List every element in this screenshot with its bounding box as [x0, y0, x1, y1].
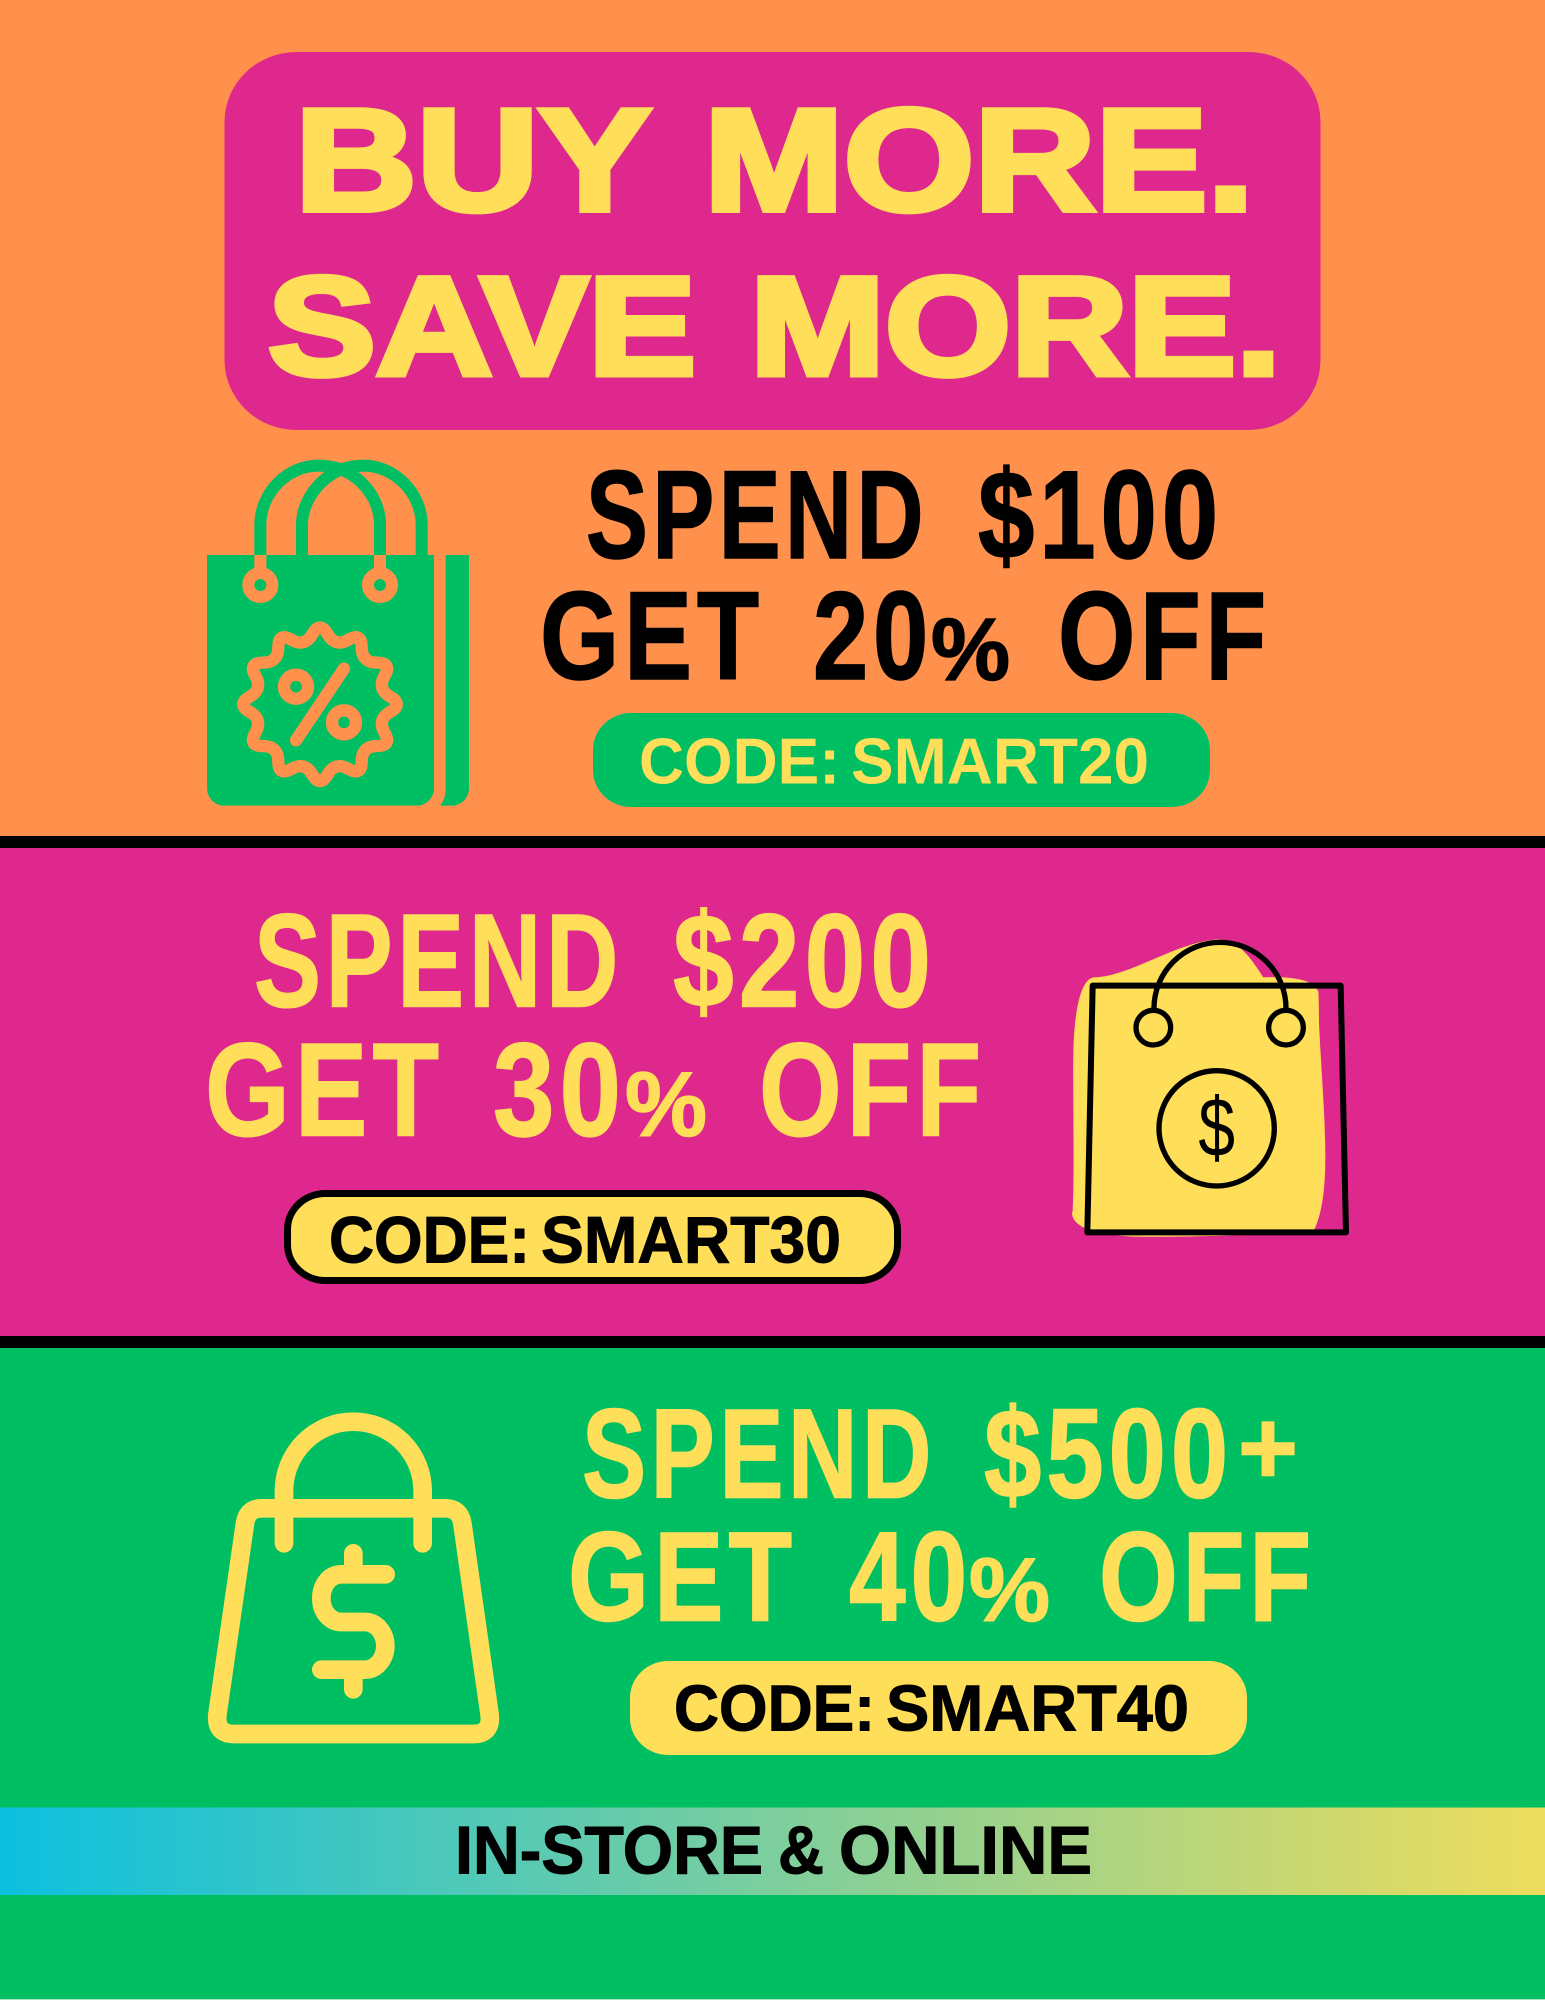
bag back panel: [440, 555, 469, 806]
code text: [674, 1672, 1189, 1744]
handle eyelets: [248, 555, 392, 597]
footer text: IN-STORE: [455, 1812, 763, 1888]
get 30 percent off: OFF: [759, 1016, 986, 1164]
code text: [639, 724, 1149, 798]
footer text: &: [778, 1812, 824, 1888]
get 20 percent off: %: [931, 600, 1010, 699]
bag outline: [1087, 986, 1346, 1232]
spend 200: SPEND: [254, 888, 623, 1036]
handle: [1154, 942, 1286, 1010]
get 40 percent off: [568, 1506, 1316, 1648]
bag body outline: [217, 1508, 490, 1734]
footer banner: [0, 1808, 1545, 1895]
get 30 percent off: 30: [493, 1016, 626, 1164]
title line 2: SAVE: [268, 248, 696, 404]
bag handles: [260, 466, 422, 555]
offer 1 headline: [540, 446, 1271, 706]
code pill: SMART30: [288, 1194, 898, 1280]
spend 500+: +: [1238, 1390, 1298, 1507]
icon: green shopping bag with percent badge: [207, 466, 469, 806]
code text: [329, 1202, 841, 1276]
icon: yellow outline shopping bag with dollar: [217, 1422, 490, 1734]
code text: SMART40: [886, 1672, 1189, 1744]
dollar coin: $: [1198, 1081, 1235, 1174]
code text: SMART20: [851, 724, 1149, 798]
title banner: [224, 52, 1320, 430]
code text: CODE:: [329, 1202, 530, 1276]
gradient band: [0, 1808, 1545, 1895]
spend 100: SPEND: [586, 446, 928, 585]
bag body: [207, 555, 434, 806]
get 40 percent off: GET: [568, 1506, 797, 1648]
percent badge: [243, 628, 397, 781]
get 40 percent off: %: [969, 1541, 1050, 1641]
get 40 percent off: OFF: [1099, 1506, 1316, 1648]
get 30 percent off: %: [625, 1054, 707, 1156]
code pill: SMART20: [593, 713, 1210, 807]
footer text: [455, 1812, 1092, 1888]
title background pill: [224, 52, 1320, 430]
panel: green bottom section: [0, 1348, 1545, 2000]
offer 2 headline: [205, 888, 986, 1164]
title line 2: [268, 248, 1281, 404]
spend 500+: SPEND: [582, 1382, 936, 1524]
dollar coin: [1159, 1071, 1274, 1186]
dollar symbol: [321, 1553, 386, 1689]
get 40 percent off: 40: [849, 1506, 972, 1648]
code text: CODE:: [674, 1672, 875, 1744]
title line 1: [295, 79, 1254, 241]
eyelets: [1136, 1010, 1303, 1045]
panel: magenta middle section: [0, 848, 1545, 1336]
title line 2: MORE.: [750, 248, 1281, 404]
get 30 percent off: [205, 1016, 986, 1164]
spend 200: $200: [673, 888, 936, 1036]
code text: SMART30: [541, 1202, 841, 1276]
icon: yellow shopping bag with dollar coin: [1072, 939, 1346, 1237]
title line 1: MORE.: [704, 79, 1254, 241]
code pill: SMART40: [630, 1661, 1247, 1755]
handle: [284, 1422, 423, 1543]
footer text: ONLINE: [839, 1812, 1092, 1888]
get 20 percent off: OFF: [1058, 567, 1271, 706]
spend 500+: $500: [984, 1382, 1233, 1524]
panel: orange top section: [0, 0, 1545, 836]
get 30 percent off: GET: [205, 1016, 444, 1164]
spend 500+: [582, 1382, 1298, 1524]
get 20 percent off: [540, 567, 1271, 706]
code text: CODE:: [639, 724, 840, 798]
title line 1: BUY: [295, 79, 651, 241]
get 20 percent off: 20: [813, 567, 933, 706]
get 20 percent off: GET: [540, 567, 764, 706]
spend 100: $100: [978, 446, 1223, 585]
offer 3 headline: [568, 1382, 1316, 1648]
yellow blob: [1072, 939, 1325, 1237]
